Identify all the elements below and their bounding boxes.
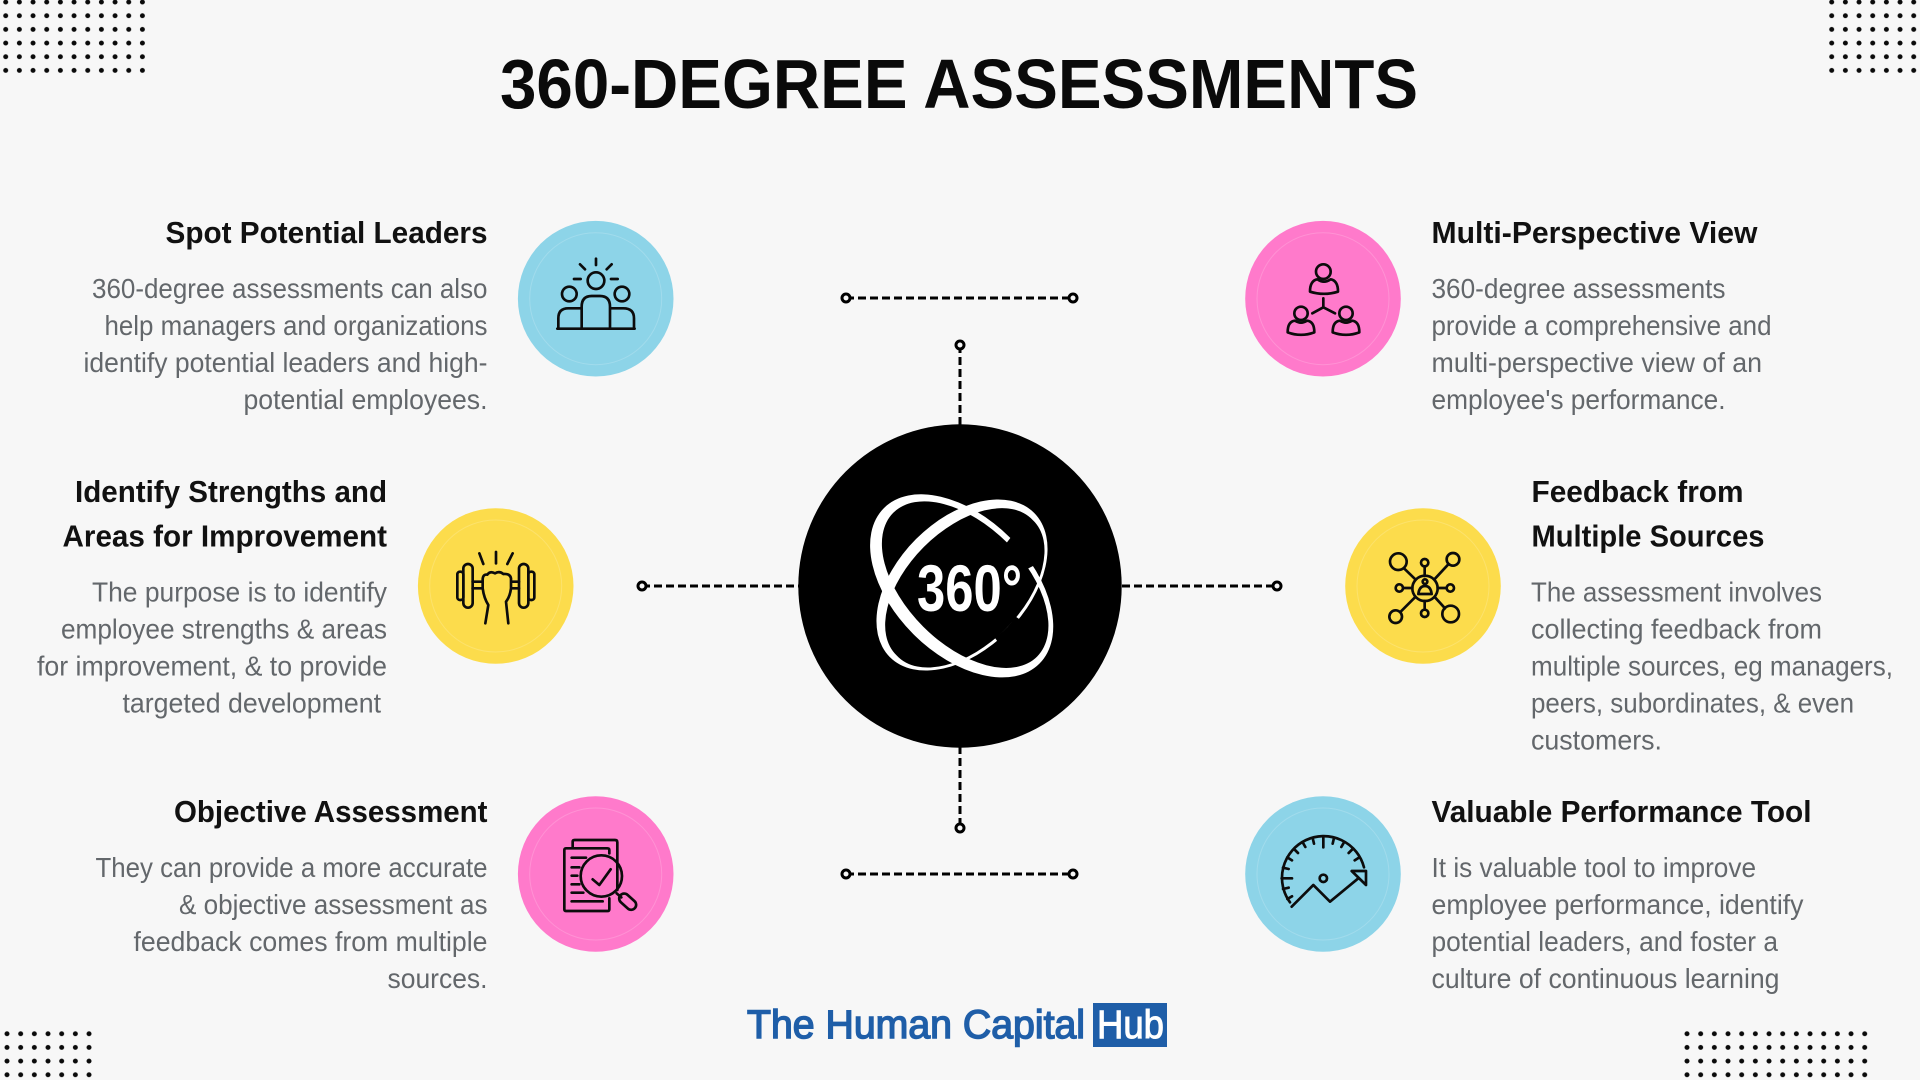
body text: employee's performance.	[1432, 384, 1726, 415]
360 label: 360°	[917, 551, 1022, 625]
icon: leaders group	[518, 221, 674, 376]
body text: feedback comes from multiple	[134, 926, 488, 957]
panel: identify strengths	[37, 474, 387, 718]
panel: spot potential leaders	[84, 215, 488, 415]
body text: The assessment involves	[1531, 576, 1822, 607]
body text: It is valuable tool to improve	[1432, 852, 1756, 883]
body text: 360-degree assessments	[1432, 273, 1726, 304]
body text: multiple sources, eg managers,	[1531, 650, 1893, 681]
body text	[1531, 576, 1893, 755]
body text: culture of continuous learning	[1432, 963, 1780, 994]
dot grid: bottom left	[0, 1027, 96, 1080]
body text: collecting feedback from	[1531, 613, 1822, 644]
connector: top horizontal	[842, 294, 1077, 302]
title: 360-DEGREE ASSESSMENTS	[500, 45, 1418, 123]
body text: sources.	[388, 963, 488, 994]
connector: left horizontal	[638, 582, 799, 590]
icon: speedometer with arrow	[1245, 796, 1401, 952]
body text: help managers and organizations	[104, 310, 488, 341]
icon: orbit rings	[870, 494, 1053, 677]
body text: & objective assessment as	[179, 889, 488, 920]
dot grid: top right	[1825, 0, 1920, 77]
heading: Feedback from	[1532, 474, 1744, 509]
dot grid: top left	[0, 0, 149, 77]
body text: for improvement, & to provide	[37, 650, 387, 681]
body text: multi-perspective view of an	[1432, 347, 1762, 378]
heading: Areas for Improvement	[62, 518, 387, 553]
logo: The Human Capital Hub: Hub	[1097, 1003, 1164, 1047]
heading: Multiple Sources	[1532, 518, 1764, 553]
heading: Objective Assessment	[174, 794, 488, 829]
body text: potential employees.	[244, 384, 488, 415]
heading	[1532, 474, 1764, 553]
connector: bottom vertical	[956, 746, 964, 832]
body text	[37, 576, 387, 718]
body text: They can provide a more accurate	[96, 852, 488, 883]
body text: potential leaders, and foster a	[1432, 926, 1778, 957]
connector: top vertical	[956, 341, 964, 426]
body text: identify potential leaders and high-	[84, 347, 488, 378]
panel: multi-perspective view	[1432, 215, 1772, 415]
body text: The purpose is to identify	[92, 576, 387, 607]
central badge: 360 degrees	[798, 424, 1122, 748]
body text	[1432, 852, 1804, 994]
body text: customers.	[1531, 724, 1662, 755]
body text	[96, 852, 488, 994]
icon: network hub	[1345, 508, 1501, 664]
panel: objective assessment	[96, 794, 488, 994]
heading: Multi-Perspective View	[1432, 215, 1758, 250]
heading: Spot Potential Leaders	[166, 215, 488, 250]
icon: three connected people	[1245, 221, 1401, 376]
heading: Valuable Performance Tool	[1432, 794, 1812, 829]
icon: dumbbell fist	[418, 508, 574, 664]
body text: provide a comprehensive and	[1432, 310, 1772, 341]
body text	[84, 273, 488, 415]
panel: feedback from multiple sources	[1531, 474, 1893, 755]
connector: right horizontal	[1122, 582, 1281, 590]
heading	[62, 474, 387, 553]
body text: employee strengths & areas	[61, 613, 387, 644]
panel: valuable performance tool	[1432, 794, 1812, 994]
body text: peers, subordinates, & even	[1531, 687, 1854, 718]
body text: employee performance, identify	[1432, 889, 1804, 920]
body text	[1432, 273, 1772, 415]
icon: document magnifier	[518, 796, 674, 952]
body text: targeted development	[122, 687, 381, 718]
body text: 360-degree assessments can also	[92, 273, 488, 304]
dot grid: bottom right	[1680, 1027, 1872, 1080]
connector: bottom horizontal	[842, 870, 1077, 878]
heading: Identify Strengths and	[75, 474, 387, 509]
logo: The Human Capital Hub: The Human Capital	[747, 1003, 1085, 1047]
